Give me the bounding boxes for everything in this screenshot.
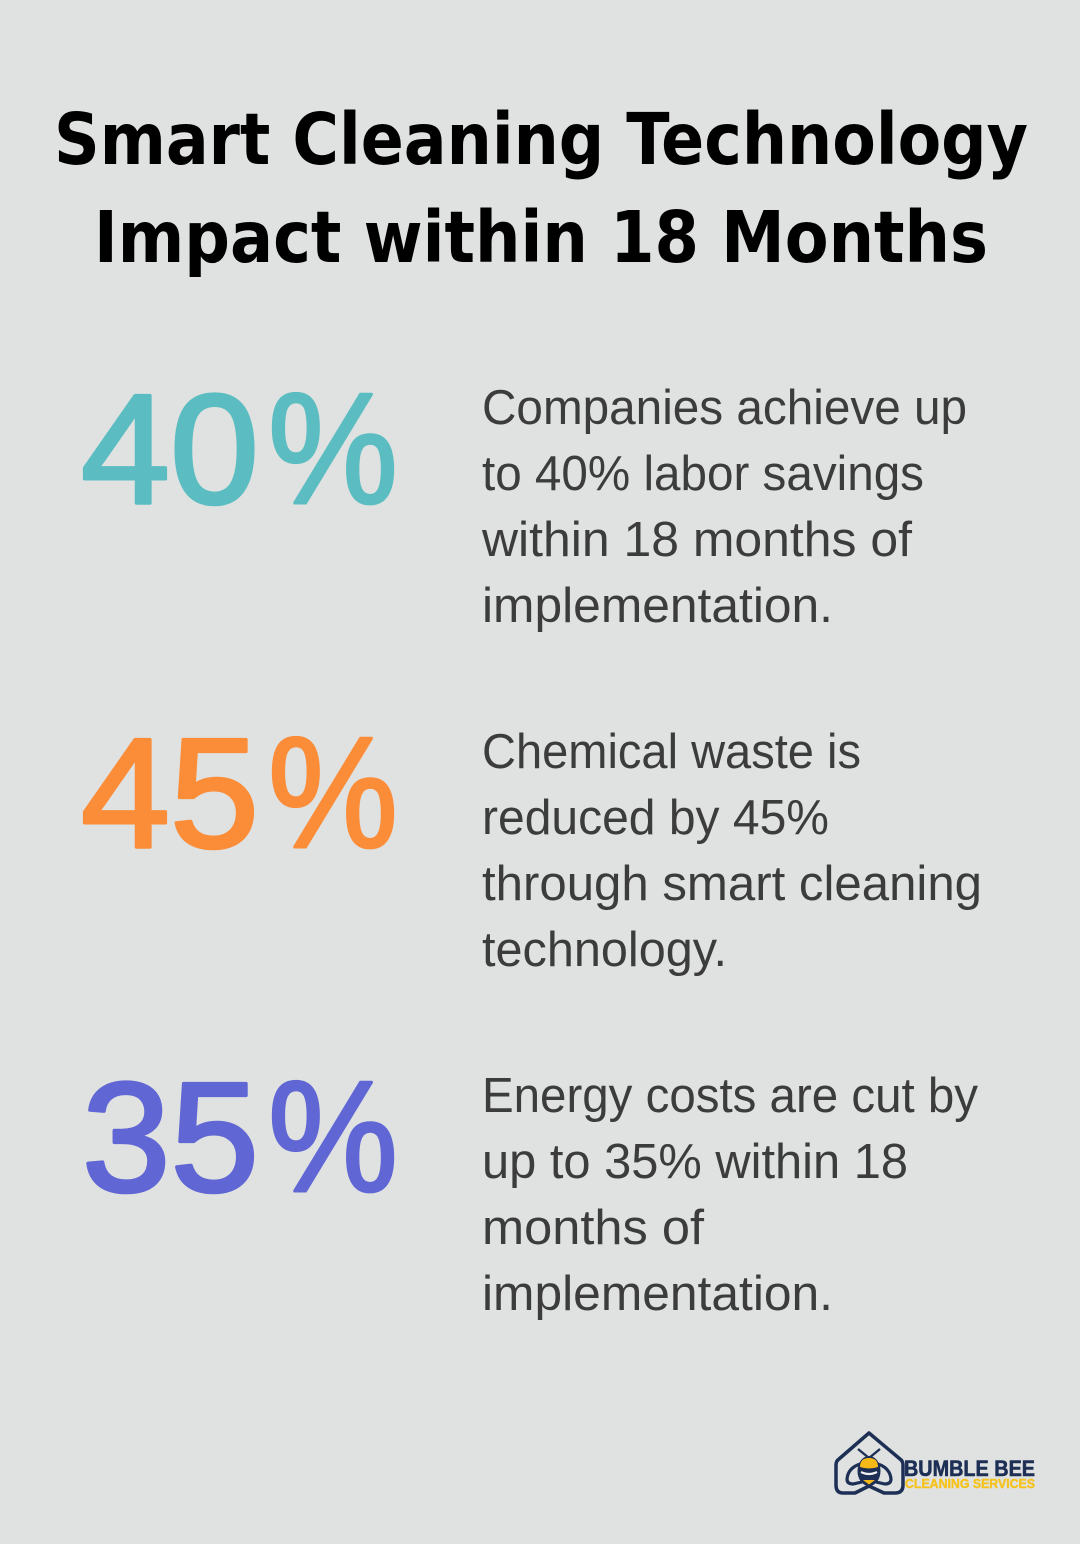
logo: Bumble Bee Cleaning Services <box>836 1433 1035 1493</box>
text block: chemical waste: through smart cleaning <box>482 857 982 911</box>
panel: 35% energy costs <box>82 1049 978 1321</box>
stat: 45% <box>81 705 398 881</box>
text block: energy costs: implementation. <box>482 1267 833 1321</box>
text block: chemical waste: reduced by 45% <box>482 791 829 845</box>
text block: chemical waste: technology. <box>482 923 727 977</box>
text block: labor savings: within 18 months of <box>481 513 912 567</box>
stat: 45%: 45 <box>81 707 259 881</box>
title: Impact within 18 Months <box>94 196 988 279</box>
text block: energy costs: up to 35% within 18 <box>482 1135 908 1189</box>
text block: labor savings: to 40% labor savings <box>482 447 924 501</box>
text block: chemical waste <box>482 725 982 977</box>
text block: energy costs: months of <box>482 1201 704 1255</box>
logo tagline: CLEANING SERVICES <box>905 1477 1035 1491</box>
text block: labor savings: Companies achieve up <box>482 381 967 435</box>
stat: 35% <box>82 1049 398 1225</box>
text block: energy costs: Energy costs are cut by <box>482 1069 978 1123</box>
stat: 40% <box>81 361 398 537</box>
stat: 40%: 40 <box>81 363 259 537</box>
title <box>54 98 1028 279</box>
text block: labor savings <box>481 381 967 633</box>
stat: 40%: % <box>268 361 398 537</box>
text block: chemical waste: Chemical waste is <box>482 725 861 779</box>
panel: 40% labor savings <box>81 361 967 633</box>
icon: house with bee <box>836 1433 903 1493</box>
stat: 35%: 35 <box>82 1051 259 1225</box>
text block: energy costs <box>482 1069 978 1321</box>
text block: labor savings: implementation. <box>482 579 833 633</box>
logo wordmark: BUMBLE BEE <box>904 1456 1035 1481</box>
stat: 45%: % <box>268 705 398 881</box>
stat: 35%: % <box>268 1049 398 1225</box>
panel: 45% chemical waste <box>81 705 982 977</box>
